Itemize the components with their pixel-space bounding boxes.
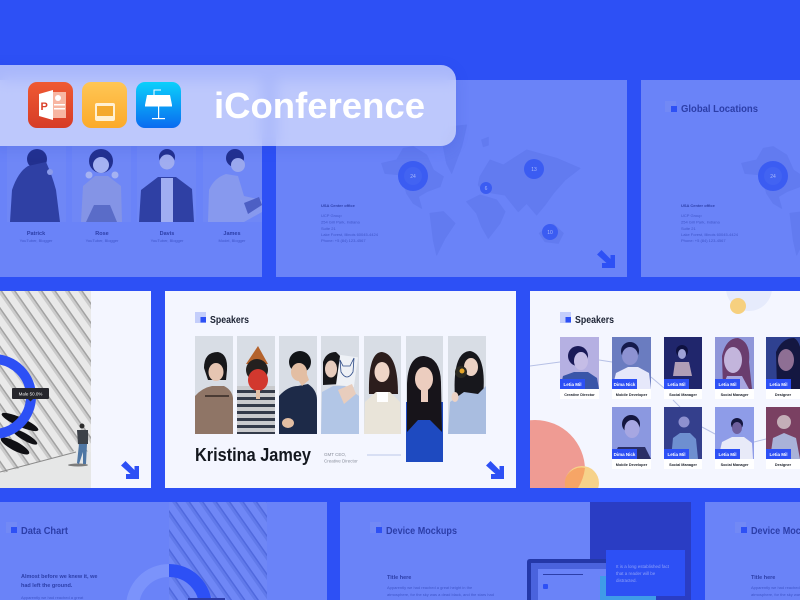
icon: arrow: [486, 461, 504, 479]
slide: data chart: [0, 502, 327, 600]
card: Designer: [766, 407, 800, 469]
slide: device mockups: [340, 502, 691, 600]
card: Social Manager: Social Manager: [721, 393, 749, 397]
card: Social Manager: [664, 337, 702, 399]
office address: USA Center office: [681, 203, 716, 208]
text block: title here: atmosphere, for the sky was a dead black, and the stars had: [387, 592, 494, 597]
divider line: [367, 454, 401, 456]
card: Social Manager: Letia Mil: [667, 382, 686, 387]
office address: Suite 21: [681, 226, 696, 231]
caption: Patrick: [20, 231, 53, 243]
caption: Davis: Davis: [160, 231, 174, 237]
slide: data chart photo: [0, 291, 151, 488]
portrait: featured speaker Kristina Jamey: [406, 336, 443, 462]
card: Mobile Developer: Mobile Developer: [616, 393, 648, 397]
connector lines: [530, 360, 766, 442]
world map continents: [382, 125, 580, 255]
office address: 254 Gril Park, Indiana: [681, 220, 720, 224]
office address: [321, 203, 379, 243]
building photo: [169, 502, 267, 600]
building photo with visitor: [0, 291, 91, 488]
icon: Keynote: [136, 82, 181, 128]
marker: 24: [758, 161, 788, 191]
portrait: Rose: [72, 146, 131, 222]
caption: James: James: [223, 231, 241, 237]
role text: [324, 452, 358, 464]
icon: PowerPoint: P: [40, 101, 48, 113]
card: Social Manager: Social Manager: [669, 393, 697, 397]
slide: global locations: [641, 80, 800, 277]
icon: Google Slides: [82, 82, 127, 128]
marker: 10: 10: [547, 230, 553, 236]
marker: 13: 13: [531, 167, 537, 173]
card: Designer: Designer: [775, 393, 792, 397]
card: Creative Director: Letia Mil: [563, 382, 582, 387]
card: Social Manager: Social Manager: [669, 463, 697, 467]
lead text: had left the ground.: [21, 583, 73, 589]
callout card: [606, 550, 685, 596]
marker: 10: [542, 224, 558, 240]
laptop mockup: [527, 559, 656, 600]
office address: Lake Forest, Illinois 60045-4424: [681, 232, 739, 237]
lead text: Almost before we knew it, we: [21, 574, 97, 580]
role text: GMT CEO,: [324, 452, 346, 457]
marker: 13: [524, 159, 544, 179]
card: Social Manager: [715, 337, 754, 399]
card: Social Manager: Letia Mil: [718, 382, 737, 387]
office address: 254 Gril Park, Indiana: [321, 220, 360, 224]
card: Mobile Developer: [612, 407, 651, 469]
icon: PowerPoint: [28, 82, 73, 128]
card: Social Manager: Social Manager: [721, 463, 749, 467]
caption: Patrick: Patrick: [27, 231, 46, 237]
office address: UCP Group: [681, 213, 702, 218]
heading: Device Mockups: [735, 522, 800, 537]
title: iConference: iConference: [214, 85, 425, 126]
text block: title here: Apparently we had reached a great height in the: [387, 585, 473, 590]
caption: Davis: [151, 231, 184, 243]
heading: Speakers: [560, 312, 614, 326]
office address: [681, 203, 739, 243]
card: Social Manager: Letia Mil: [667, 452, 686, 457]
portrait: woman with flower: [448, 336, 486, 434]
frosted title panel: [0, 65, 456, 146]
heading: Speakers: Speakers: [575, 315, 614, 326]
slide: device mockups repeat: [705, 502, 800, 600]
card: Social Manager: [664, 407, 702, 469]
dark background panel: [590, 502, 691, 600]
card: Creative Director: Creative Director: [564, 393, 595, 397]
donut chart ring: [0, 359, 31, 434]
decorative circles: [530, 291, 772, 488]
portrait: Davis: [137, 146, 196, 222]
role text: Creative Director: [324, 458, 358, 464]
slide: speakers Kristina Jamey: [165, 291, 516, 488]
slide: world map: [276, 80, 627, 277]
text block: title here: [751, 575, 800, 597]
office address: Phone: +5 (84) 123-4567: [321, 238, 366, 243]
heading: Global Locations: [665, 101, 758, 115]
caption: Rose: YouTuber, Blogger: [86, 238, 119, 243]
callout card: that a reader will be: [616, 571, 656, 576]
heading: Global Locations: Global Locations: [681, 104, 758, 115]
caption: James: Model, Blogger: [219, 238, 246, 243]
card: Mobile Developer: Mobile Developer: [616, 463, 648, 467]
marker: 24: 24: [410, 174, 416, 180]
marker: 24: 24: [770, 174, 776, 180]
name: Kristina Jamey: Kristina Jamey: [195, 445, 311, 465]
caption: Rose: Rose: [95, 231, 109, 237]
portrait: woman in cream cardigan: [364, 336, 401, 434]
caption: Rose: [86, 231, 119, 243]
office address: Suite 21: [321, 226, 336, 231]
card: Designer: Letia Mil: [769, 452, 788, 457]
partial world map: [742, 147, 800, 254]
office address: Lake Forest, Illinois 60045-4424: [321, 232, 379, 237]
office address: USA Center office: [321, 203, 356, 208]
heading: Data Chart: Data Chart: [21, 526, 69, 537]
lead text: [21, 574, 97, 589]
office address: UCP Group: [321, 213, 342, 218]
card: Designer: [766, 337, 800, 399]
tooltip: Male 50.0%: Male 50.0%: [19, 392, 42, 396]
card: Social Manager: Letia Mil: [718, 452, 737, 457]
callout card: It is a long established fact: [616, 564, 670, 569]
marker: 6: 6: [485, 186, 488, 192]
slide: team portraits: [0, 80, 262, 277]
card: Mobile Developer: [612, 337, 651, 399]
text block: title here: Title here: [387, 575, 411, 581]
callout card: distracted.: [616, 578, 637, 583]
portrait: woman with cat drawing: [321, 336, 359, 434]
portrait: Patrick: [7, 146, 66, 222]
icon: arrow: [597, 250, 615, 268]
body text: Apparently we had reached a great: [21, 595, 84, 600]
portrait: man in navy sweater: [279, 336, 317, 434]
portrait: James: [208, 149, 262, 222]
office address: Phone: +5 (84) 123-4567: [681, 238, 726, 243]
heading: Data Chart: [6, 522, 69, 537]
tooltip: [188, 598, 225, 600]
marker: 6: [480, 182, 492, 194]
card: Social Manager: [715, 407, 754, 469]
slide: speakers grid: [530, 291, 800, 488]
card: Mobile Developer: Dima Nick: [614, 382, 636, 387]
caption: Patrick: YouTuber, Blogger: [20, 238, 53, 243]
portrait: woman in brown sweater: [195, 336, 233, 434]
text block: title here: Title here: [751, 575, 775, 581]
heading: Device Mockups: Device Mockups: [386, 526, 457, 537]
donut chart: [132, 570, 206, 600]
icon: arrow: [121, 461, 139, 479]
heading: Device Mockups: [370, 522, 457, 537]
card: Designer: Letia Mil: [769, 382, 788, 387]
portrait: person with beanie and red paddle: [237, 336, 275, 434]
caption: James: [219, 231, 246, 243]
card: Mobile Developer: Dima Nick: [614, 452, 636, 457]
caption: Davis: YouTuber, Blogger: [151, 238, 184, 243]
card: Designer: Designer: [775, 463, 792, 467]
card: Creative Director: [560, 337, 599, 399]
text block: title here: [387, 575, 494, 597]
marker: 24: [398, 161, 428, 191]
heading: Speakers: Speakers: [210, 315, 249, 326]
heading: Speakers: [195, 312, 249, 326]
tooltip: Male 50.0%: [12, 388, 49, 402]
